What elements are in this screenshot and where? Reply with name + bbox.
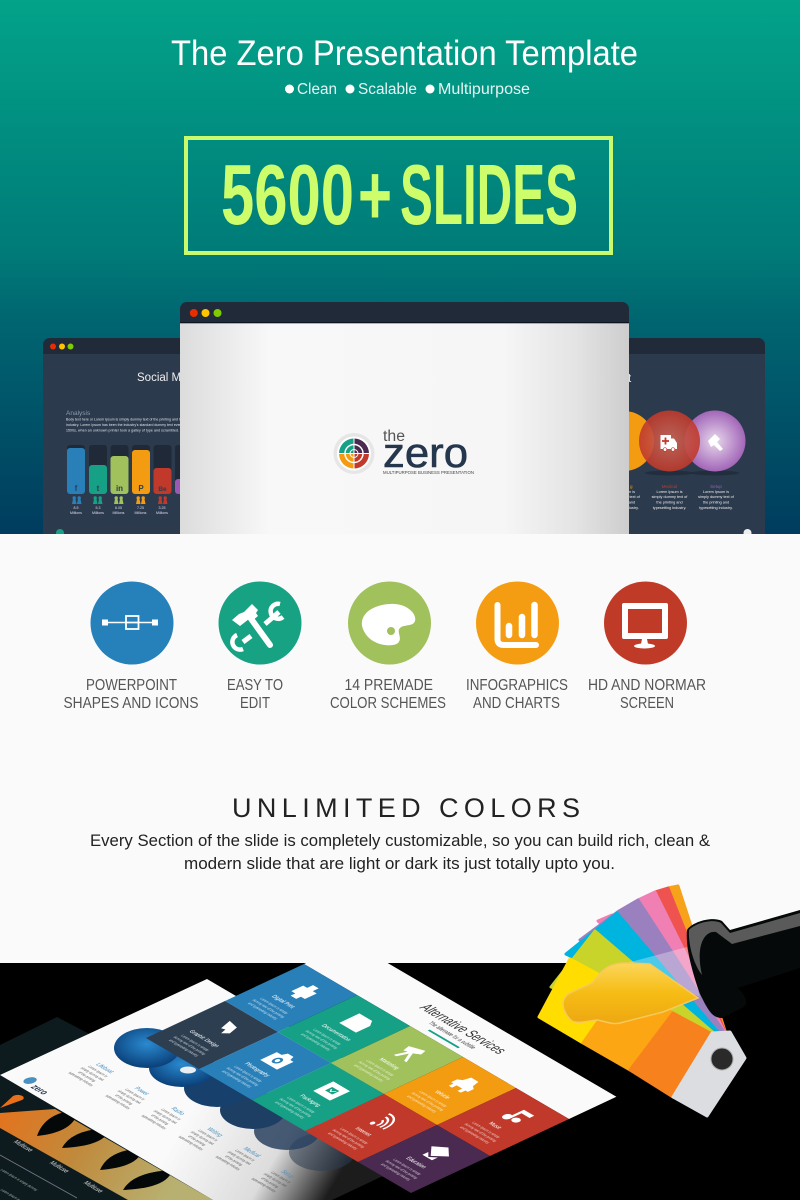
slide labels: of the printing [114,1094,134,1105]
tile: photography [199,1032,331,1100]
colour swatch fan with dropper [539,886,800,1116]
description text: modern slide that are light or dark its just totally upto you. [184,855,615,873]
browser window: social media slide: f [75,484,78,493]
slide labels: Lorem Ipsum is [270,1171,292,1184]
feature: powerpoint shapes and icons [64,582,198,712]
slide labels: simply dummy text [262,1173,289,1188]
tile: graphic design: Lorem Ipsum is simply [180,1034,210,1052]
white slide strip [304,942,616,1119]
browser window: circles slide: simply dummy text of [652,495,688,499]
feature: 14 premade color schemes [330,582,446,712]
icon: music note [500,1107,534,1125]
browser window: circles slide: Lorem Ipsum is [657,490,683,494]
slide labels: typesetting industry. [250,1177,278,1193]
browser window: social media slide: Be [158,486,167,493]
tile: photography: and typesetting industry. [220,1070,253,1089]
logo: the zero: the [383,428,405,445]
tile: internet: and typesetting industry. [326,1132,359,1151]
black bottom band [0,963,800,1200]
browser window: circles slide: the printing and [703,500,729,504]
browser window: circles slide: typesetting industry. [699,506,733,510]
tile: vehicle: dummy text of the printing [410,1092,445,1111]
slide labels: simply dummy text [79,1067,106,1082]
browser window: circles slide: simply dummy text of [604,495,641,499]
feature: powerpoint shapes and icons: POWERPOINT [86,677,177,694]
description text [90,832,710,873]
tile: packaging: dummy text of the printing [278,1098,313,1117]
blue discs [114,1028,355,1171]
browser window: circles slide: Lorem Ipsum is [609,490,635,494]
tile: internet: Lorem Ipsum is simply [339,1127,369,1145]
feature: infographics and charts [466,582,568,712]
browser window: social media slide: 5.3 [96,506,100,510]
slide labels: of the printing [224,1155,244,1166]
slide labels: typesetting industry. [214,1155,242,1171]
tile: documentation: dummy text of the printing [304,1030,339,1049]
browser window: social media slide: in [116,484,123,493]
browser window: social media slide: Body text here or Lorem Ipsum is simply dummy text of the printing and typesetting [66,418,196,422]
slide labels: Lorem Ipsum is [160,1108,182,1121]
tile: photography: Photography [242,1062,271,1078]
browser window: circles slide: g [630,484,633,489]
tile: graphic design: dummy text of the printing [172,1036,207,1055]
swatch tag [673,1032,745,1116]
headline box: 5600+ slides: + [358,148,392,243]
slide labels: typesetting industry. [140,1114,168,1130]
browser window: circles slide: the printing and [609,500,635,504]
icon: wifi [369,1114,401,1130]
title: The Zero Presentation Template [171,34,638,73]
browser window: main cover slide [180,302,629,534]
tile: education: dummy text of the printing [384,1160,419,1179]
browser window: social media slide [43,338,180,534]
tile: vehicle [384,1057,516,1125]
tile: vehicle: Lorem Ipsum is simply [418,1090,448,1108]
slide labels: Writing [204,1127,224,1138]
icon: car [446,1075,483,1094]
browser window: circles slide: Medical [662,484,677,489]
feature: 14 premade color schemes: 14 PREMADE [344,677,433,694]
bulb highlight [689,913,800,975]
browser window: social media slide: industry. Lorem Ipsum has been the industry's standard dummy text ever since the [66,423,196,427]
slide labels: simply dummy text [152,1110,179,1125]
slide subtitle: The alternate for a subtitle [426,1021,477,1050]
isometric slide: dark petals: Multiuse [11,1140,35,1153]
slide labels: simply dummy text [189,1131,216,1146]
subtitle with bullets: Scalable [358,81,417,98]
isometric slide: alternative services [146,942,616,1193]
icon: document [339,1013,376,1033]
feature: easy to edit: EDIT [240,695,270,712]
icon: pen [213,1021,242,1036]
browser window: circles slide: typesetting industry. [653,506,686,510]
slide labels: Lorem Ipsum is [197,1129,219,1142]
feature: easy to edit: EASY TO [227,677,283,694]
logo: the zero [334,428,474,476]
browser window: social media slide: 1500s, when an unknown printer took a galley of type and scrambled. [66,428,179,432]
isometric slide: dark petals: Multiuse [47,1161,71,1174]
slide labels: Power [132,1087,150,1096]
tile: music: dummy text of the printing [463,1123,498,1142]
tile: photography: dummy text of the printing [225,1067,260,1086]
browser window: social media slide: Analysis [66,410,91,417]
tile: education: Lorem Ipsum is simply [392,1158,422,1176]
tile: music [437,1088,569,1156]
tile: marketing: and typesetting industry. [352,1064,385,1083]
feature: easy to edit [218,582,302,712]
slide labels: Setup [278,1170,296,1179]
slide labels: of the printing [150,1114,170,1125]
browser window: circles slide: typesetting industry. [605,506,639,510]
hero gradient background [0,0,800,534]
feature: infographics and charts: AND CHARTS [473,695,560,712]
heading: unlimited colors: UNLIMITED COLORS [232,793,580,823]
browser window: social media slide: Millions [135,511,147,515]
tile: documentation: Documentation [319,1024,352,1042]
slide labels: Lorem Ipsum is [124,1088,146,1101]
tile: marketing: Marketing [377,1057,400,1071]
icon: package [313,1081,350,1101]
dropper yellow liquid [563,963,698,1024]
browser window: circles slide: the printing and [656,500,683,504]
tile: digital print: dummy text of the printing [251,999,286,1018]
subtitle with bullets [285,81,530,98]
tile: marketing: Lorem Ipsum is simply [365,1059,395,1077]
slide labels: Radio [168,1107,186,1116]
tile: documentation: Lorem Ipsum is simply [312,1028,342,1046]
browser window: circles slide: Setup [710,484,722,489]
slide heading: Alternative Services [416,1002,511,1056]
slide labels: Medical [241,1147,261,1158]
subtitle with bullets: Clean [297,81,337,98]
tile: education: Education [404,1156,428,1170]
tile: music: Lorem Ipsum is simply [471,1121,501,1139]
slide labels: Lorem Ipsum is [87,1065,109,1078]
slide labels: simply dummy text [226,1151,253,1166]
tile: marketing: dummy text of the printing [357,1061,392,1080]
tile: music: Music [486,1121,503,1131]
tile: graphic design [146,1001,278,1069]
slide labels: typesetting industry. [67,1071,95,1087]
browser window: social media slide: Millions [70,511,82,515]
icon: graduation cap [418,1142,457,1163]
icon: camera [260,1050,298,1070]
description text: Every Section of the slide is completely customizable, so you can build rich, clean & [90,832,710,850]
isometric slide: dark petals: Multiuse [81,1181,105,1194]
tile: vehicle: Vehicle [432,1090,451,1100]
tile: education: and typesetting industry. [379,1163,412,1182]
dropper clear glass [627,947,700,997]
tile: digital print: Lorem Ipsum is simply [259,997,289,1015]
icon: telescope [392,1044,428,1062]
feature: 14 premade color schemes: COLOR SCHEMES [330,695,446,712]
tile: internet: Internet [353,1127,373,1138]
browser window: social media slide: t [97,484,100,493]
tile: packaging: and typesetting industry. [273,1101,306,1120]
logo: the zero: zero [383,429,468,476]
dropper bulb [687,910,800,1018]
feature: hd and normal screen: SCREEN [620,695,674,712]
tile: education [358,1125,490,1193]
tile: digital print [225,964,357,1032]
tile: digital print: and typesetting industry. [246,1002,279,1021]
slide labels: of the printing [260,1177,280,1188]
isometric slide: dark petals [0,1017,230,1200]
isometric slide: dark petals: Lorem Ipsum is simply dummy [0,1169,39,1191]
icon: printer [287,983,323,1001]
slide labels: Lorem Ipsum is [234,1149,256,1162]
subtitle underline [428,1030,460,1048]
slide labels: typesetting industry. [104,1094,132,1110]
small slide logo: zero [28,1083,52,1096]
browser window: social media slide: 7.25 [137,506,144,510]
headline box: 5600+ slides: 5600 [221,148,354,243]
tile: photography: Lorem Ipsum is simply [233,1065,263,1083]
tile: packaging [252,1063,384,1131]
slide labels: Lifeboat [93,1063,115,1075]
subtitle with bullets: Multipurpose [438,81,530,98]
tile: vehicle: and typesetting industry. [405,1095,438,1114]
browser window: social media slide: 6.05 [115,506,122,510]
slide labels: typesetting industry. [177,1135,205,1151]
browser window: social media slide: Social Media [137,372,203,384]
browser window: circles slide [629,338,765,534]
headline box: 5600+ slides [186,138,611,253]
browser window: social media slide: P [138,484,144,493]
tile: internet [305,1094,437,1162]
tile: packaging: Packaging [297,1094,322,1108]
tile: packaging: Lorem Ipsum is simply [286,1096,316,1114]
slide labels: of the printing [187,1135,207,1146]
tile: digital print: Digital Print [269,995,296,1010]
slide labels: simply dummy text [116,1090,143,1105]
tag hole [711,1048,733,1070]
feature: hd and normal screen [588,582,706,712]
slide labels: of the printing [77,1071,97,1082]
feature: hd and normal screen: HD AND NORMAR [588,677,706,694]
browser window: social media slide: Millions [92,511,104,515]
logo: the zero: MULTIPURPOSE BUSINESS PRESENTATION [383,470,474,475]
tile: internet: dummy text of the printing [331,1129,366,1148]
headline box: 5600+ slides: SLIDES [400,148,578,243]
browser window: social media slide: 3.25 [158,506,166,510]
tile: graphic design: and typesetting industry. [167,1039,200,1058]
tile: marketing [331,1026,463,1094]
feature: powerpoint shapes and icons: SHAPES AND ICONS [64,695,198,712]
tile: music: and typesetting industry. [458,1126,491,1145]
slide labels [67,1060,302,1193]
tile: graphic design: Graphic Design [187,1029,220,1048]
tile: documentation: and typesetting industry. [299,1033,332,1052]
browser window: circles slide: Lorem Ipsum is [703,490,729,494]
browser window: social media slide: Millions [113,511,125,515]
isometric slide: white with blue discs [0,979,472,1200]
small slide logo [18,1076,55,1096]
browser window: circles slide: simply dummy text of [698,495,735,499]
tile: documentation [278,995,410,1063]
browser window: circles slide: t [628,373,632,385]
feature: infographics and charts: INFOGRAPHICS [466,677,568,694]
browser window: social media slide: 8.5 [74,506,78,510]
browser window: social media slide: Millions [156,511,168,515]
fan cards [539,886,727,1097]
